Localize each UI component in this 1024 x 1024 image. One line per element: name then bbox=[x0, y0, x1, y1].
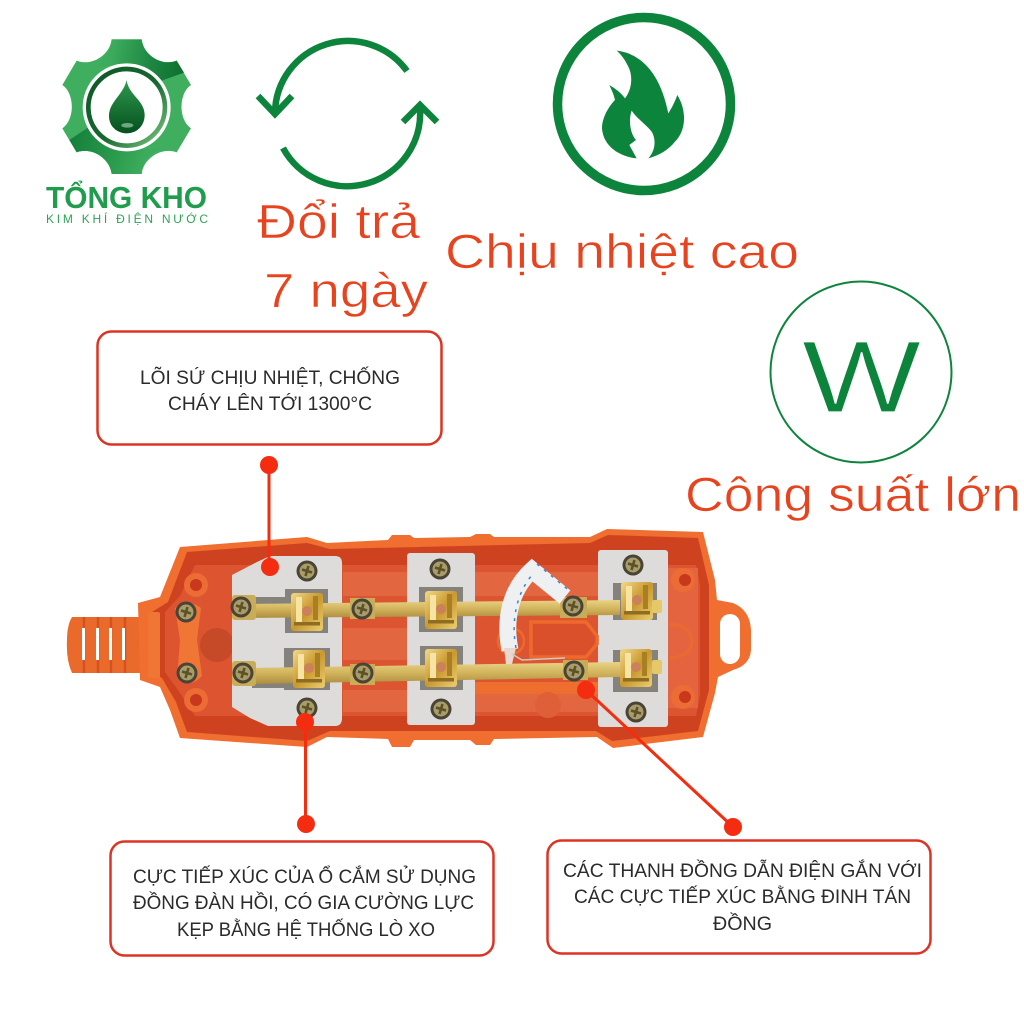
callout: socket contacts: ĐỒNG ĐÀN HỒI, CÓ GIA CƯỜNG LỰC bbox=[133, 892, 474, 914]
icon: gear with water drop bbox=[62, 39, 191, 174]
callout pointer: copper bars bbox=[577, 681, 742, 836]
callout: ceramic core: CHÁY LÊN TỚI 1300°C bbox=[168, 393, 372, 415]
brass bars bbox=[246, 600, 620, 684]
lever and cord clamp bbox=[148, 603, 234, 684]
callout: socket contacts bbox=[110, 842, 494, 956]
contact clips bbox=[291, 593, 323, 631]
brass tips bbox=[652, 600, 662, 674]
mounting posts bbox=[184, 568, 695, 712]
block notches bbox=[252, 583, 658, 692]
icon: W power bbox=[770, 282, 952, 462]
callout: copper bars: CÁC CỰC TIẾP XÚC BẰNG ĐINH TÁN bbox=[574, 886, 911, 908]
product photo: socket interior bbox=[67, 529, 751, 748]
callout pointer: contact bbox=[296, 713, 315, 833]
housing bbox=[138, 529, 751, 748]
callout: copper bars bbox=[548, 840, 930, 954]
hanging tab hole bbox=[720, 614, 740, 664]
housing interior bbox=[152, 535, 709, 741]
heading: heat resistance: Chịu nhiệt cao bbox=[445, 226, 799, 279]
logo wordmark: TỔNG KHO bbox=[46, 179, 207, 215]
housing floor bbox=[165, 565, 700, 716]
red plastic loop bbox=[531, 622, 597, 657]
callout: socket contacts: KẸP BẰNG HỆ THỐNG LÒ XO bbox=[177, 919, 435, 941]
ceramic blocks bbox=[232, 550, 668, 727]
callout: socket contacts: CỰC TIẾP XÚC CỦA Ổ CẮM SỬ DỤNG bbox=[133, 866, 476, 888]
white insulated wire bbox=[504, 564, 571, 664]
logo: Tong Kho bbox=[46, 39, 208, 226]
icon: return arrows bbox=[258, 41, 437, 186]
heading: return policy: 7 ngày bbox=[264, 265, 428, 318]
floor marks bbox=[498, 624, 692, 658]
callout: ceramic core: LÕI SỨ CHỊU NHIỆT, CHỐNG bbox=[140, 367, 400, 389]
logo tagline: KIM KHÍ ĐIỆN NƯỚC bbox=[46, 211, 208, 226]
heading: return policy: Đổi trả bbox=[257, 196, 420, 249]
callout: copper bars: CÁC THANH ĐỒNG DẪN ĐIỆN GẮN VỚI bbox=[563, 860, 922, 882]
icon: W power: W bbox=[802, 320, 921, 434]
heading: high power: Công suất lớn bbox=[685, 469, 1021, 522]
icon: flame in circle bbox=[558, 18, 730, 190]
cord strain relief bbox=[67, 617, 140, 673]
heading: return policy bbox=[257, 196, 428, 318]
callout: ceramic core bbox=[98, 332, 442, 444]
callout: copper bars: ĐỒNG bbox=[713, 913, 772, 935]
screws bbox=[230, 596, 252, 618]
callout pointer: ceramic core bbox=[260, 456, 279, 576]
bar terminals and rivet plates bbox=[232, 595, 588, 686]
